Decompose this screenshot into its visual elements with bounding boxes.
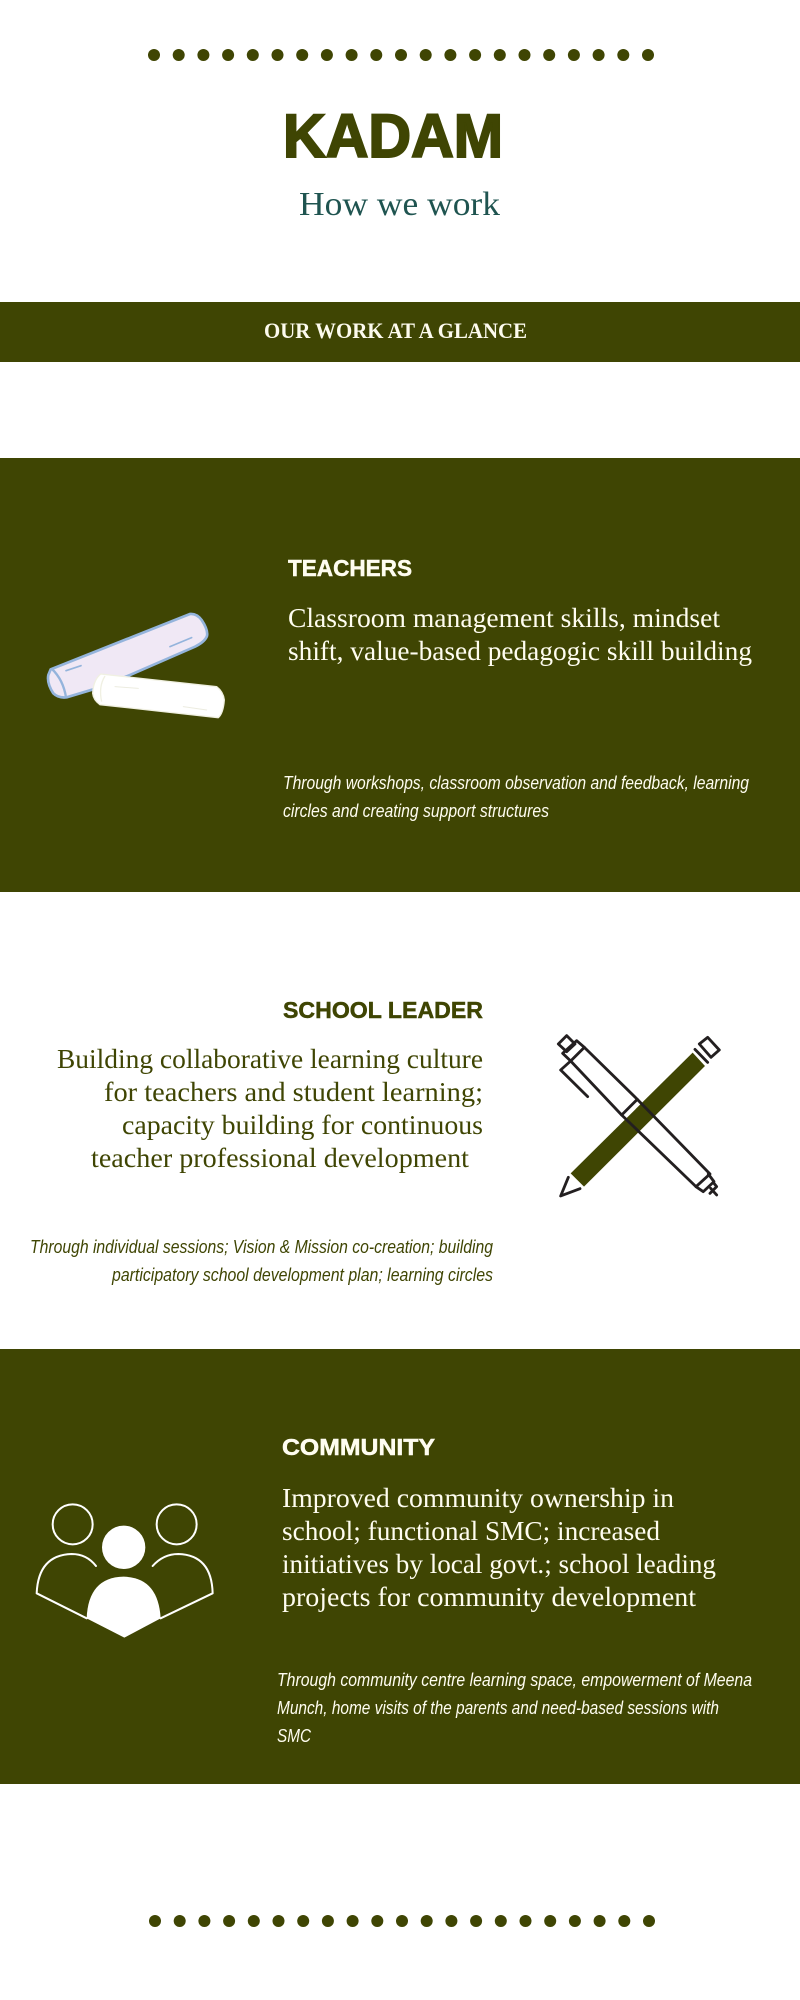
text: school leader outcomes: for teachers and student learning;	[104, 1077, 483, 1107]
heading: school leader: SCHOOL LEADER	[283, 997, 483, 1023]
text: teachers outcomes	[288, 603, 752, 666]
text: teachers outcomes: Classroom management skills, mindset	[288, 603, 720, 633]
panel: school leader	[30, 997, 719, 1285]
text: school leader outcomes: teacher professional development	[91, 1143, 470, 1173]
text: school leader outcomes: Building collaborative learning culture	[57, 1044, 483, 1074]
panel: teachers	[0, 458, 800, 892]
text: community methods: SMC	[277, 1725, 312, 1746]
text: community outcomes: initiatives by local govt.; school leading	[282, 1549, 716, 1579]
banner: our work at a glance: OUR WORK AT A GLANCE	[264, 318, 527, 343]
text: school leader outcomes	[57, 1044, 483, 1173]
bottom dotted row	[149, 1915, 655, 1927]
text: community methods: Munch, home visits of the parents and need-based sessions with	[277, 1697, 719, 1718]
subtitle: How we work	[299, 186, 500, 223]
text: community outcomes: projects for community development	[282, 1582, 697, 1612]
text: community outcomes	[282, 1483, 716, 1612]
text: school leader methods: Through individual sessions; Vision & Mission co-creation; building	[30, 1236, 494, 1257]
text: school leader methods	[30, 1236, 494, 1285]
heading: teachers: TEACHERS	[288, 555, 412, 581]
top dotted row	[148, 49, 654, 61]
text: school leader outcomes: capacity building for continuous	[122, 1110, 483, 1140]
banner: our work at a glance	[0, 302, 800, 362]
text: teachers outcomes: shift, value-based pedagogic skill building	[288, 636, 752, 666]
text: school leader methods: participatory school development plan; learning circles	[111, 1264, 493, 1285]
text: community outcomes: Improved community ownership in	[282, 1483, 675, 1513]
heading: community: COMMUNITY	[282, 1434, 435, 1460]
icon: chalk sticks	[48, 614, 224, 718]
panel: community	[0, 1349, 800, 1784]
text: community outcomes: school; functional SMC; increased	[282, 1516, 660, 1546]
title: KADAM	[283, 102, 503, 170]
text: teachers methods: circles and creating support structures	[283, 800, 549, 821]
icon: group of people	[37, 1504, 213, 1638]
icon: crossed pen and pencil	[558, 1036, 719, 1196]
text: teachers methods	[283, 772, 750, 821]
text: community methods	[277, 1669, 752, 1746]
